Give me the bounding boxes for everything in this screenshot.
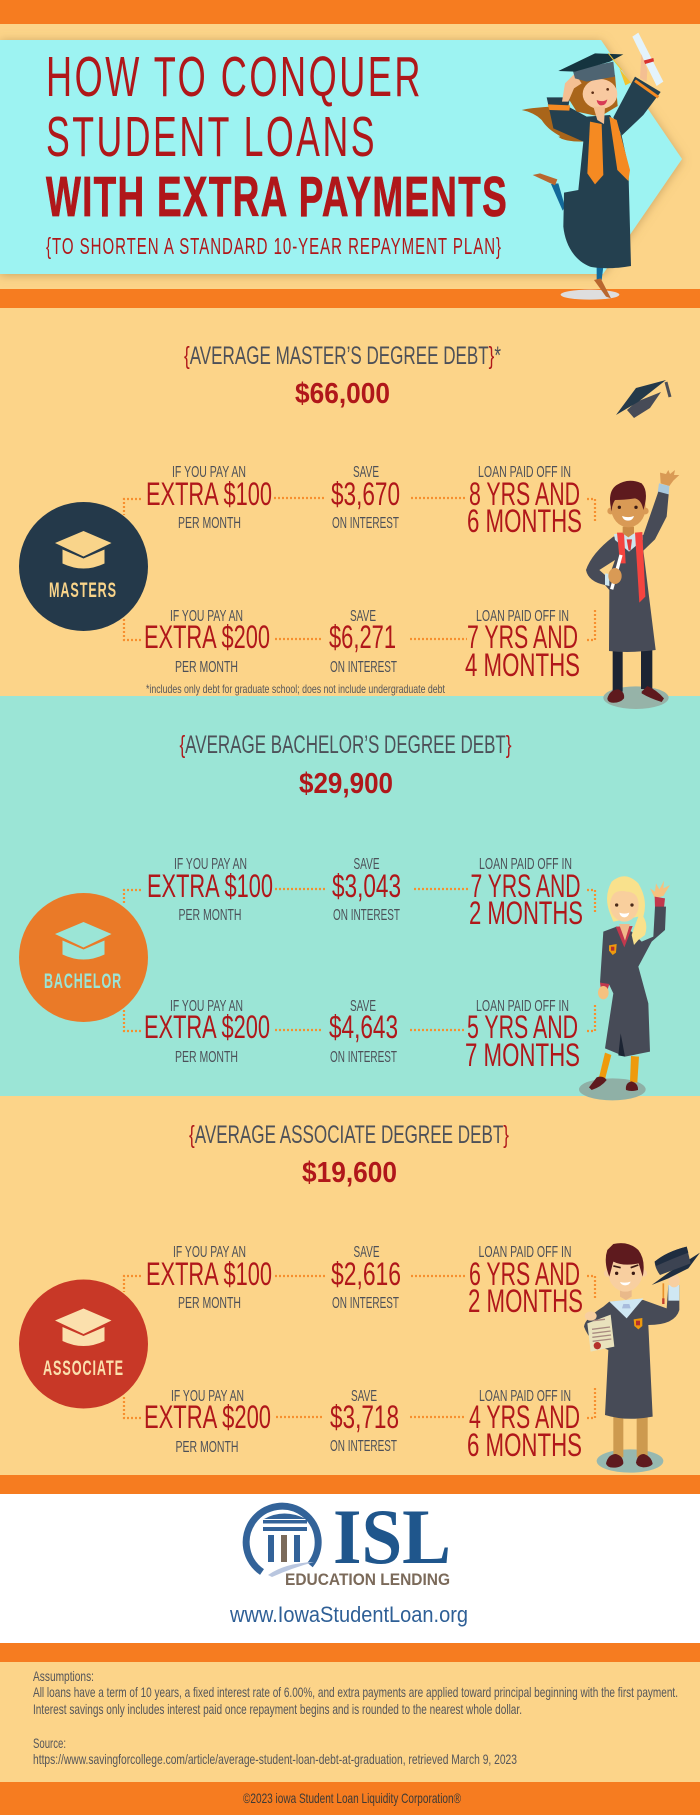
- row: extra $100: 8 YRS AND: [469, 476, 580, 512]
- row: extra $100: 2 MONTHS: [468, 1283, 583, 1319]
- panel: associate: [0, 1096, 700, 1475]
- row: extra $200: EXTRA $200: [144, 619, 270, 655]
- row: extra $100: SAVE: [354, 1244, 380, 1261]
- text block: assumptions and source: Assumptions:: [33, 1668, 94, 1684]
- title: [46, 45, 508, 229]
- row: extra $200: 4 MONTHS: [465, 647, 580, 683]
- badge label: BACHELOR: [44, 970, 122, 993]
- row: extra $200: SAVE: [350, 608, 376, 625]
- illustration: jumping graduate: [522, 33, 663, 300]
- row: extra $100: 6 MONTHS: [467, 503, 582, 539]
- panel: logo footer: [0, 1475, 700, 1662]
- heading: {AVERAGE ASSOCIATE DEGREE DEBT}: [189, 1121, 509, 1149]
- row: extra $200: IF YOU PAY AN: [170, 998, 243, 1015]
- logo tagline: EDUCATION LENDING: [285, 1570, 450, 1589]
- connector lines: [124, 889, 595, 1031]
- row: extra $100: IF YOU PAY AN: [172, 464, 246, 481]
- row: extra $200: ON INTEREST: [330, 659, 397, 676]
- logo wordmark: ISL: [333, 1493, 451, 1580]
- panel: masters: [0, 308, 700, 696]
- illustration: male graduate with diploma and hat: [584, 1243, 700, 1473]
- row: extra $200: IF YOU PAY AN: [171, 1388, 244, 1405]
- icon: flying cap: [616, 380, 670, 418]
- badge: bachelor: [19, 893, 148, 1022]
- icon: mortarboard: [55, 531, 112, 568]
- logo emblem: [246, 1506, 318, 1577]
- row: extra $100: LOAN PAID OFF IN: [478, 464, 571, 481]
- connector lines: [124, 1276, 595, 1418]
- row: extra $200: SAVE: [350, 998, 376, 1015]
- row: extra $100: [147, 856, 583, 931]
- title: STUDENT LOANS: [46, 105, 377, 169]
- row: extra $200: LOAN PAID OFF IN: [476, 608, 569, 625]
- row: extra $200: PER MONTH: [175, 1049, 238, 1066]
- heading: {AVERAGE BACHELOR’S DEGREE DEBT}: [180, 731, 512, 759]
- row: extra $200: SAVE: [351, 1388, 377, 1405]
- row: extra $200: [144, 608, 580, 683]
- footnote: *includes only debt for graduate school; does not include undergraduate debt: [146, 682, 445, 696]
- icon: mortarboard: [55, 1308, 112, 1346]
- row: extra $200: LOAN PAID OFF IN: [476, 998, 569, 1015]
- row: extra $200: 7 YRS AND: [467, 619, 578, 655]
- row: extra $200: 5 YRS AND: [467, 1009, 578, 1045]
- row: extra $200: PER MONTH: [176, 1439, 238, 1456]
- badge label: MASTERS: [49, 579, 117, 602]
- row: extra $200: $6,271: [329, 619, 396, 655]
- row: extra $100: 2 MONTHS: [469, 895, 583, 931]
- row: extra $100: $3,043: [332, 868, 401, 904]
- row: extra $100: ON INTEREST: [332, 515, 399, 532]
- debt amount: $19,600: [302, 1157, 397, 1189]
- row: extra $100: $3,670: [331, 476, 400, 512]
- row: extra $100: PER MONTH: [178, 1295, 241, 1312]
- text block: assumptions and source: https://www.savingforcollege.com/article/average-student-loan-debt-at-graduation, retrieved March 9, 2023: [33, 1751, 517, 1767]
- row: extra $100: EXTRA $100: [146, 1256, 272, 1292]
- row: extra $100: PER MONTH: [178, 515, 241, 532]
- row: extra $100: EXTRA $100: [147, 868, 273, 904]
- footer bar: copyright: ©2023 iowa Student Loan Liquidity Corporation®: [243, 1790, 461, 1806]
- row: extra $100: ON INTEREST: [333, 907, 400, 924]
- header arrow banner: [0, 40, 682, 274]
- row: extra $100: LOAN PAID OFF IN: [479, 856, 572, 873]
- row: extra $200: 4 YRS AND: [469, 1399, 580, 1435]
- heading: {AVERAGE MASTER’S DEGREE DEBT}*: [184, 342, 501, 370]
- row: extra $200: LOAN PAID OFF IN: [479, 1388, 571, 1405]
- row: extra $200: 6 MONTHS: [467, 1427, 582, 1463]
- illustration: male graduate waving: [586, 470, 679, 709]
- row: extra $100: [146, 1244, 583, 1319]
- website url: www.IowaStudentLoan.org: [229, 1602, 468, 1627]
- panel: header: [0, 0, 700, 308]
- row: extra $100: $2,616: [331, 1256, 401, 1292]
- panel: bachelor: [0, 696, 700, 1096]
- row: extra $100: EXTRA $100: [146, 476, 272, 512]
- icon: mortarboard: [55, 922, 112, 960]
- row: extra $200: EXTRA $200: [144, 1399, 271, 1435]
- row: extra $200: $3,718: [330, 1399, 399, 1435]
- row: extra $200: IF YOU PAY AN: [170, 608, 243, 625]
- row: extra $200: ON INTEREST: [330, 1049, 397, 1066]
- debt amount: $29,900: [299, 768, 393, 800]
- debt amount: $66,000: [295, 378, 390, 410]
- row: extra $200: [144, 998, 580, 1073]
- row: extra $100: LOAN PAID OFF IN: [478, 1244, 572, 1261]
- row: extra $100: SAVE: [354, 856, 380, 873]
- row: extra $100: PER MONTH: [178, 907, 242, 924]
- row: extra $200: [144, 1388, 582, 1463]
- footer bar: copyright: [0, 1782, 700, 1815]
- badge: masters: [19, 502, 148, 631]
- badge: associate: [19, 1280, 148, 1408]
- connector lines: [124, 498, 595, 640]
- text block: assumptions and source: Source:: [33, 1735, 66, 1751]
- row: extra $100: 6 YRS AND: [469, 1256, 580, 1292]
- logo: ISL: [246, 1493, 451, 1589]
- text block: assumptions and source: [33, 1668, 678, 1767]
- row: extra $200: EXTRA $200: [144, 1009, 270, 1045]
- row: extra $200: 7 MONTHS: [465, 1037, 580, 1073]
- badge label: ASSOCIATE: [43, 1357, 124, 1380]
- text block: assumptions and source: Interest savings only includes interest paid once repayment begins and is rounded to the nearest whole dollar.: [33, 1701, 522, 1717]
- row: extra $100: SAVE: [353, 464, 379, 481]
- row: extra $200: ON INTEREST: [330, 1438, 397, 1455]
- row: extra $100: IF YOU PAY AN: [174, 856, 247, 873]
- illustration: female graduate waving: [579, 876, 670, 1100]
- title: HOW TO CONQUER: [46, 45, 423, 109]
- row: extra $100: ON INTEREST: [332, 1295, 399, 1312]
- row: extra $100: [146, 464, 582, 539]
- row: extra $100: IF YOU PAY AN: [173, 1244, 246, 1261]
- row: extra $200: $4,643: [329, 1009, 398, 1045]
- row: extra $100: 7 YRS AND: [470, 868, 580, 904]
- row: extra $200: PER MONTH: [175, 659, 238, 676]
